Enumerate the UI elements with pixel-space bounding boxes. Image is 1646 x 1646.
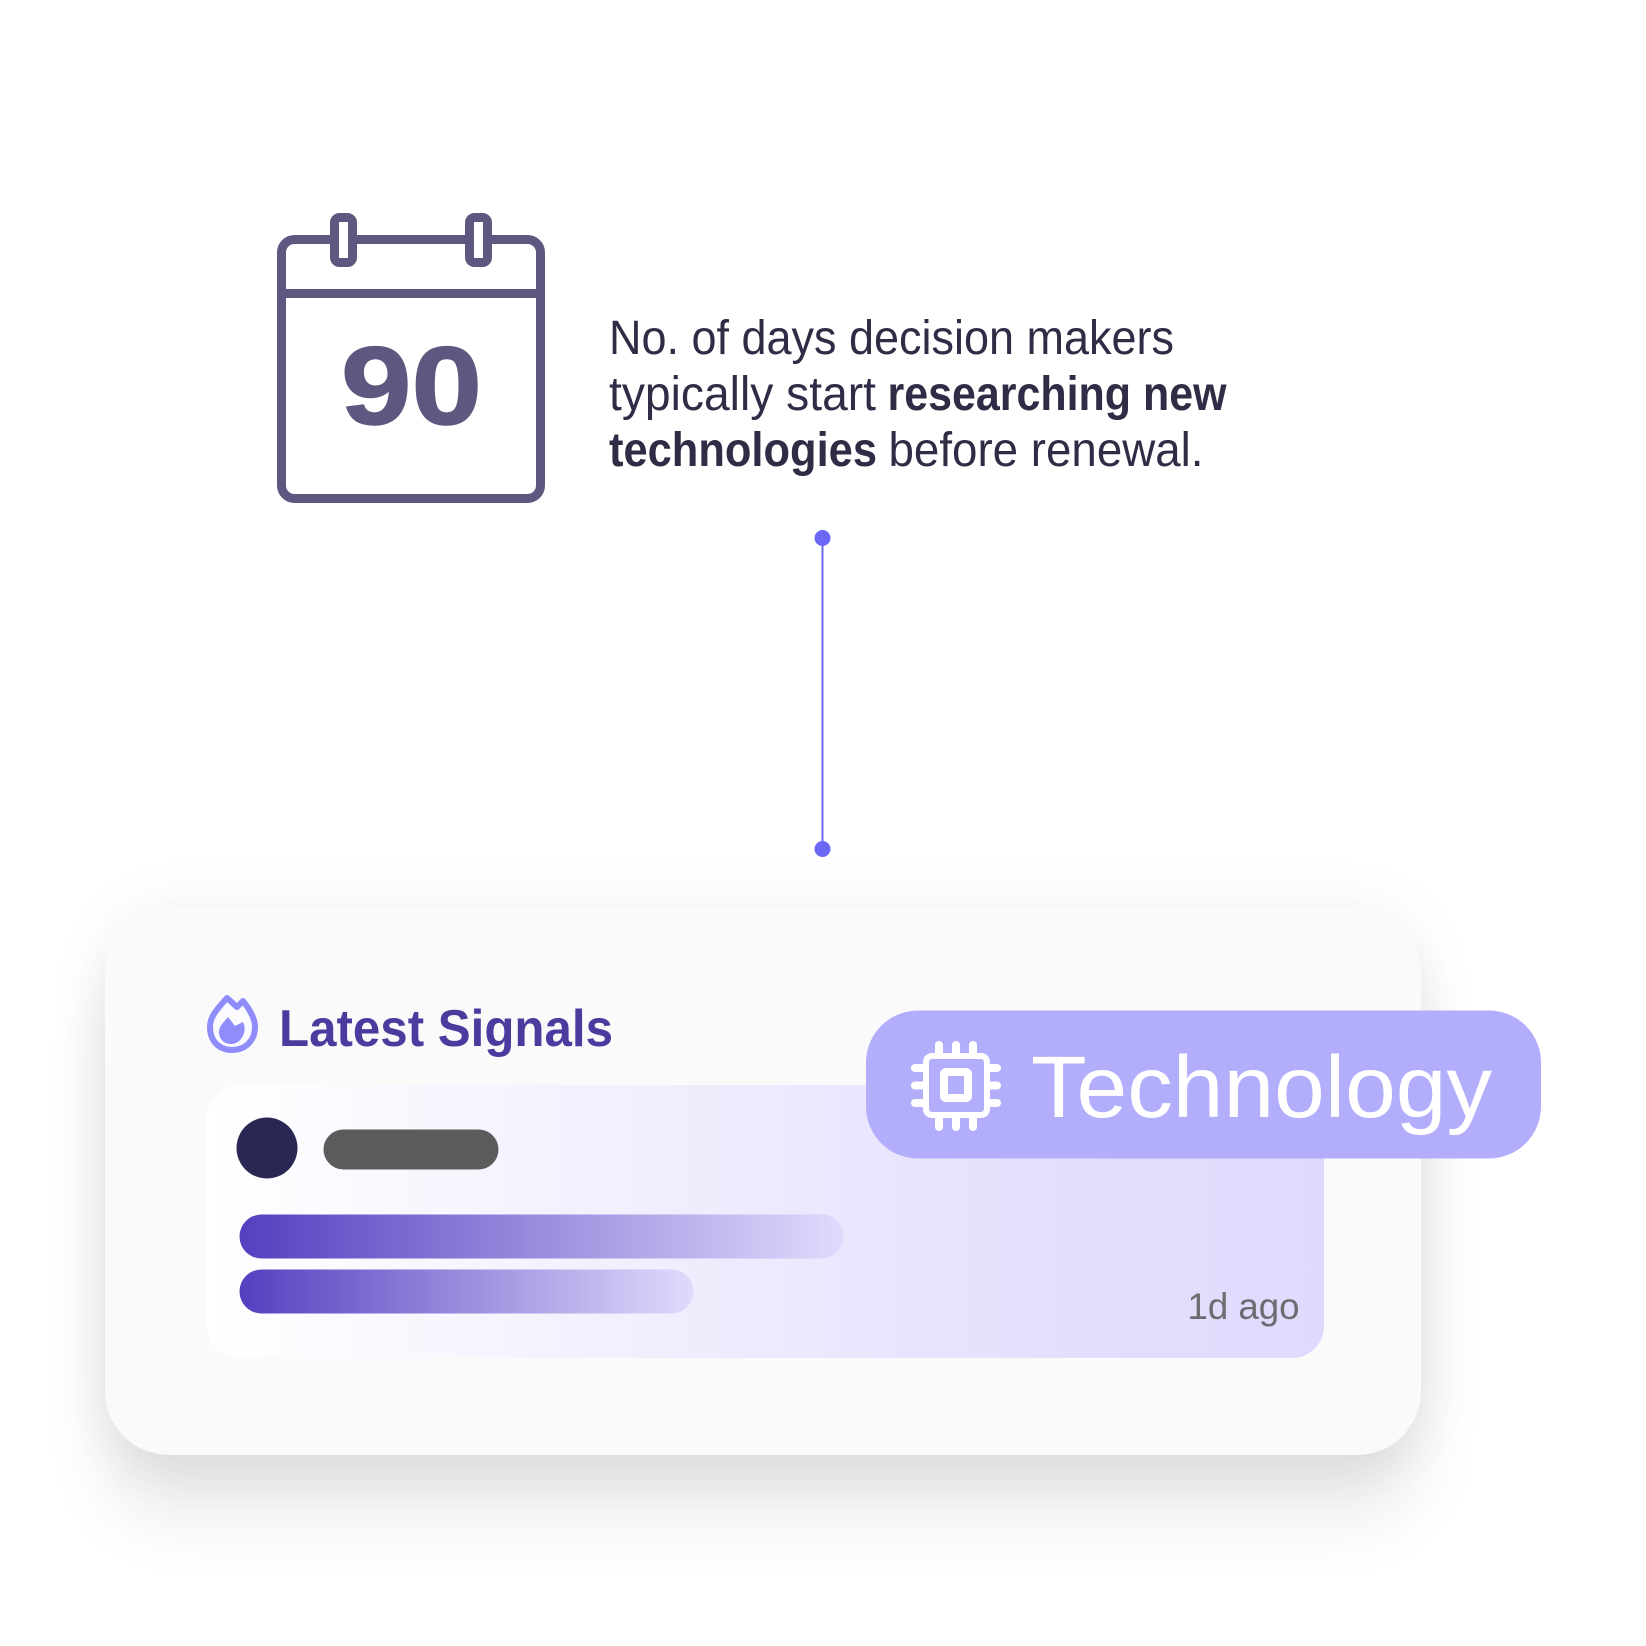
icon: microchip: [915, 1045, 997, 1127]
text block: description of 90 days: [609, 312, 1227, 477]
panel: latest signals card: [105, 908, 1421, 1522]
icon: flame: [210, 998, 255, 1050]
text placeholder bar 2: [240, 1270, 694, 1314]
connector line with end dots: [814, 530, 830, 857]
text block: description of 90 days: technologies: [609, 424, 877, 477]
timestamp: 1d ago: [1188, 1286, 1300, 1327]
tag: Technology: [866, 1010, 1541, 1158]
text block: description of 90 days: researching new: [888, 368, 1227, 421]
panel: signal row: [207, 1085, 1324, 1358]
icon: calendar showing 90: 90: [341, 325, 482, 448]
text placeholder bar 1: [240, 1214, 844, 1258]
icon: calendar showing 90: [277, 218, 545, 498]
text block: description of 90 days: before renewal.: [888, 424, 1204, 477]
text block: description of 90 days: No. of days decision makers: [609, 312, 1174, 365]
tag label: Technology: [1031, 1039, 1493, 1136]
name placeholder pill: [324, 1130, 498, 1170]
avatar circle: [236, 1118, 298, 1178]
heading: Latest Signals: Latest Signals: [279, 1000, 613, 1058]
text block: description of 90 days: typically start: [609, 368, 876, 421]
